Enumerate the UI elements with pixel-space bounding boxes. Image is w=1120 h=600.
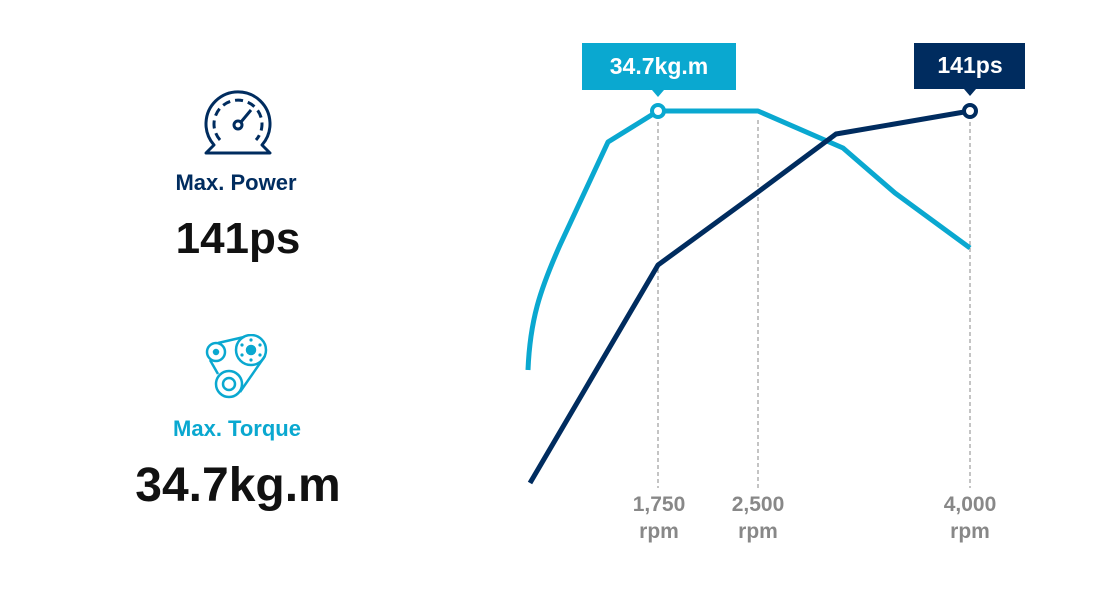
icon: speedometer [204,90,272,154]
callout: torque [582,43,736,97]
axis labels: 1,750 [633,493,685,516]
callout: power: 141ps [937,52,1003,78]
axis labels: rpm [738,520,778,543]
callout: power [914,43,1025,96]
value: 34.7kg.m: 34.7kg.m [135,459,341,512]
value: 141ps: 141ps [176,214,300,263]
heading: Max. Power: Max. Power [175,170,297,195]
callout: torque: 34.7kg.m [610,53,708,79]
axis labels [633,493,996,543]
power line [530,105,976,483]
axis labels: rpm [950,520,990,543]
icon: belt pulleys [206,334,268,398]
torque line [528,105,970,370]
axis labels: 4,000 [944,493,996,516]
axis labels: rpm [639,520,679,543]
axis labels: 2,500 [732,493,784,516]
heading: Max. Torque: Max. Torque [173,416,301,441]
